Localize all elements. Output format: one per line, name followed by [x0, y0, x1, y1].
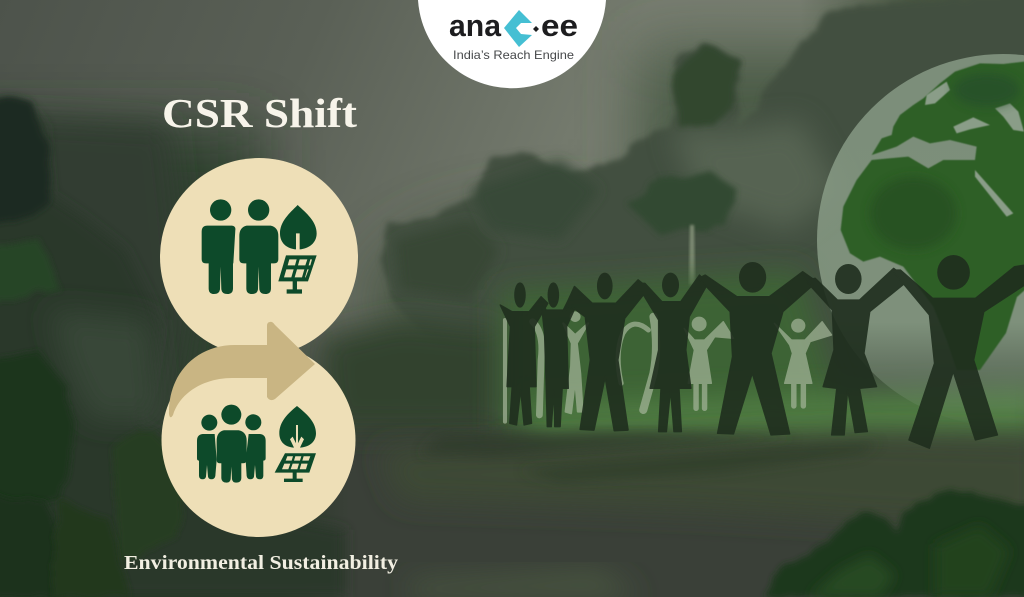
people chain silhouettes [500, 255, 1024, 448]
misty distant treeline [0, 50, 1024, 460]
logo tagline: India’s Reach Engine [453, 48, 574, 62]
title: CSR Shift [162, 90, 357, 136]
globe [817, 54, 1024, 426]
arrow: shift from before to after [169, 322, 315, 417]
circle: before [160, 158, 358, 356]
lower fog floor [380, 435, 1024, 530]
logo wordmark: ee [541, 8, 578, 43]
figure 4 [662, 273, 679, 297]
solar panel [275, 453, 316, 482]
bottom-right foreground tree [764, 490, 1024, 597]
leaf [279, 406, 316, 448]
globe landmass [841, 60, 1024, 370]
light figures behind [505, 311, 832, 422]
icon: two people with leaf and solar panel [202, 199, 317, 294]
far figures [514, 282, 526, 308]
logo wordmark [449, 8, 578, 47]
logo badge [418, 0, 606, 88]
circle: after [162, 343, 356, 537]
left forest [0, 115, 190, 440]
figure 7 [937, 255, 970, 290]
icon: group of three people with leaf and solar panel [197, 405, 316, 483]
solar panel [278, 255, 317, 294]
central tree mass [380, 0, 1024, 420]
logo wordmark: ana [449, 8, 502, 43]
figure 6 [835, 264, 862, 294]
figure 5 [739, 262, 766, 293]
leaf [280, 205, 317, 249]
caption: Environmental Sustainability [124, 553, 398, 574]
grass glow [520, 385, 1024, 440]
dark figures [500, 255, 1024, 448]
figure 3 [597, 273, 613, 299]
